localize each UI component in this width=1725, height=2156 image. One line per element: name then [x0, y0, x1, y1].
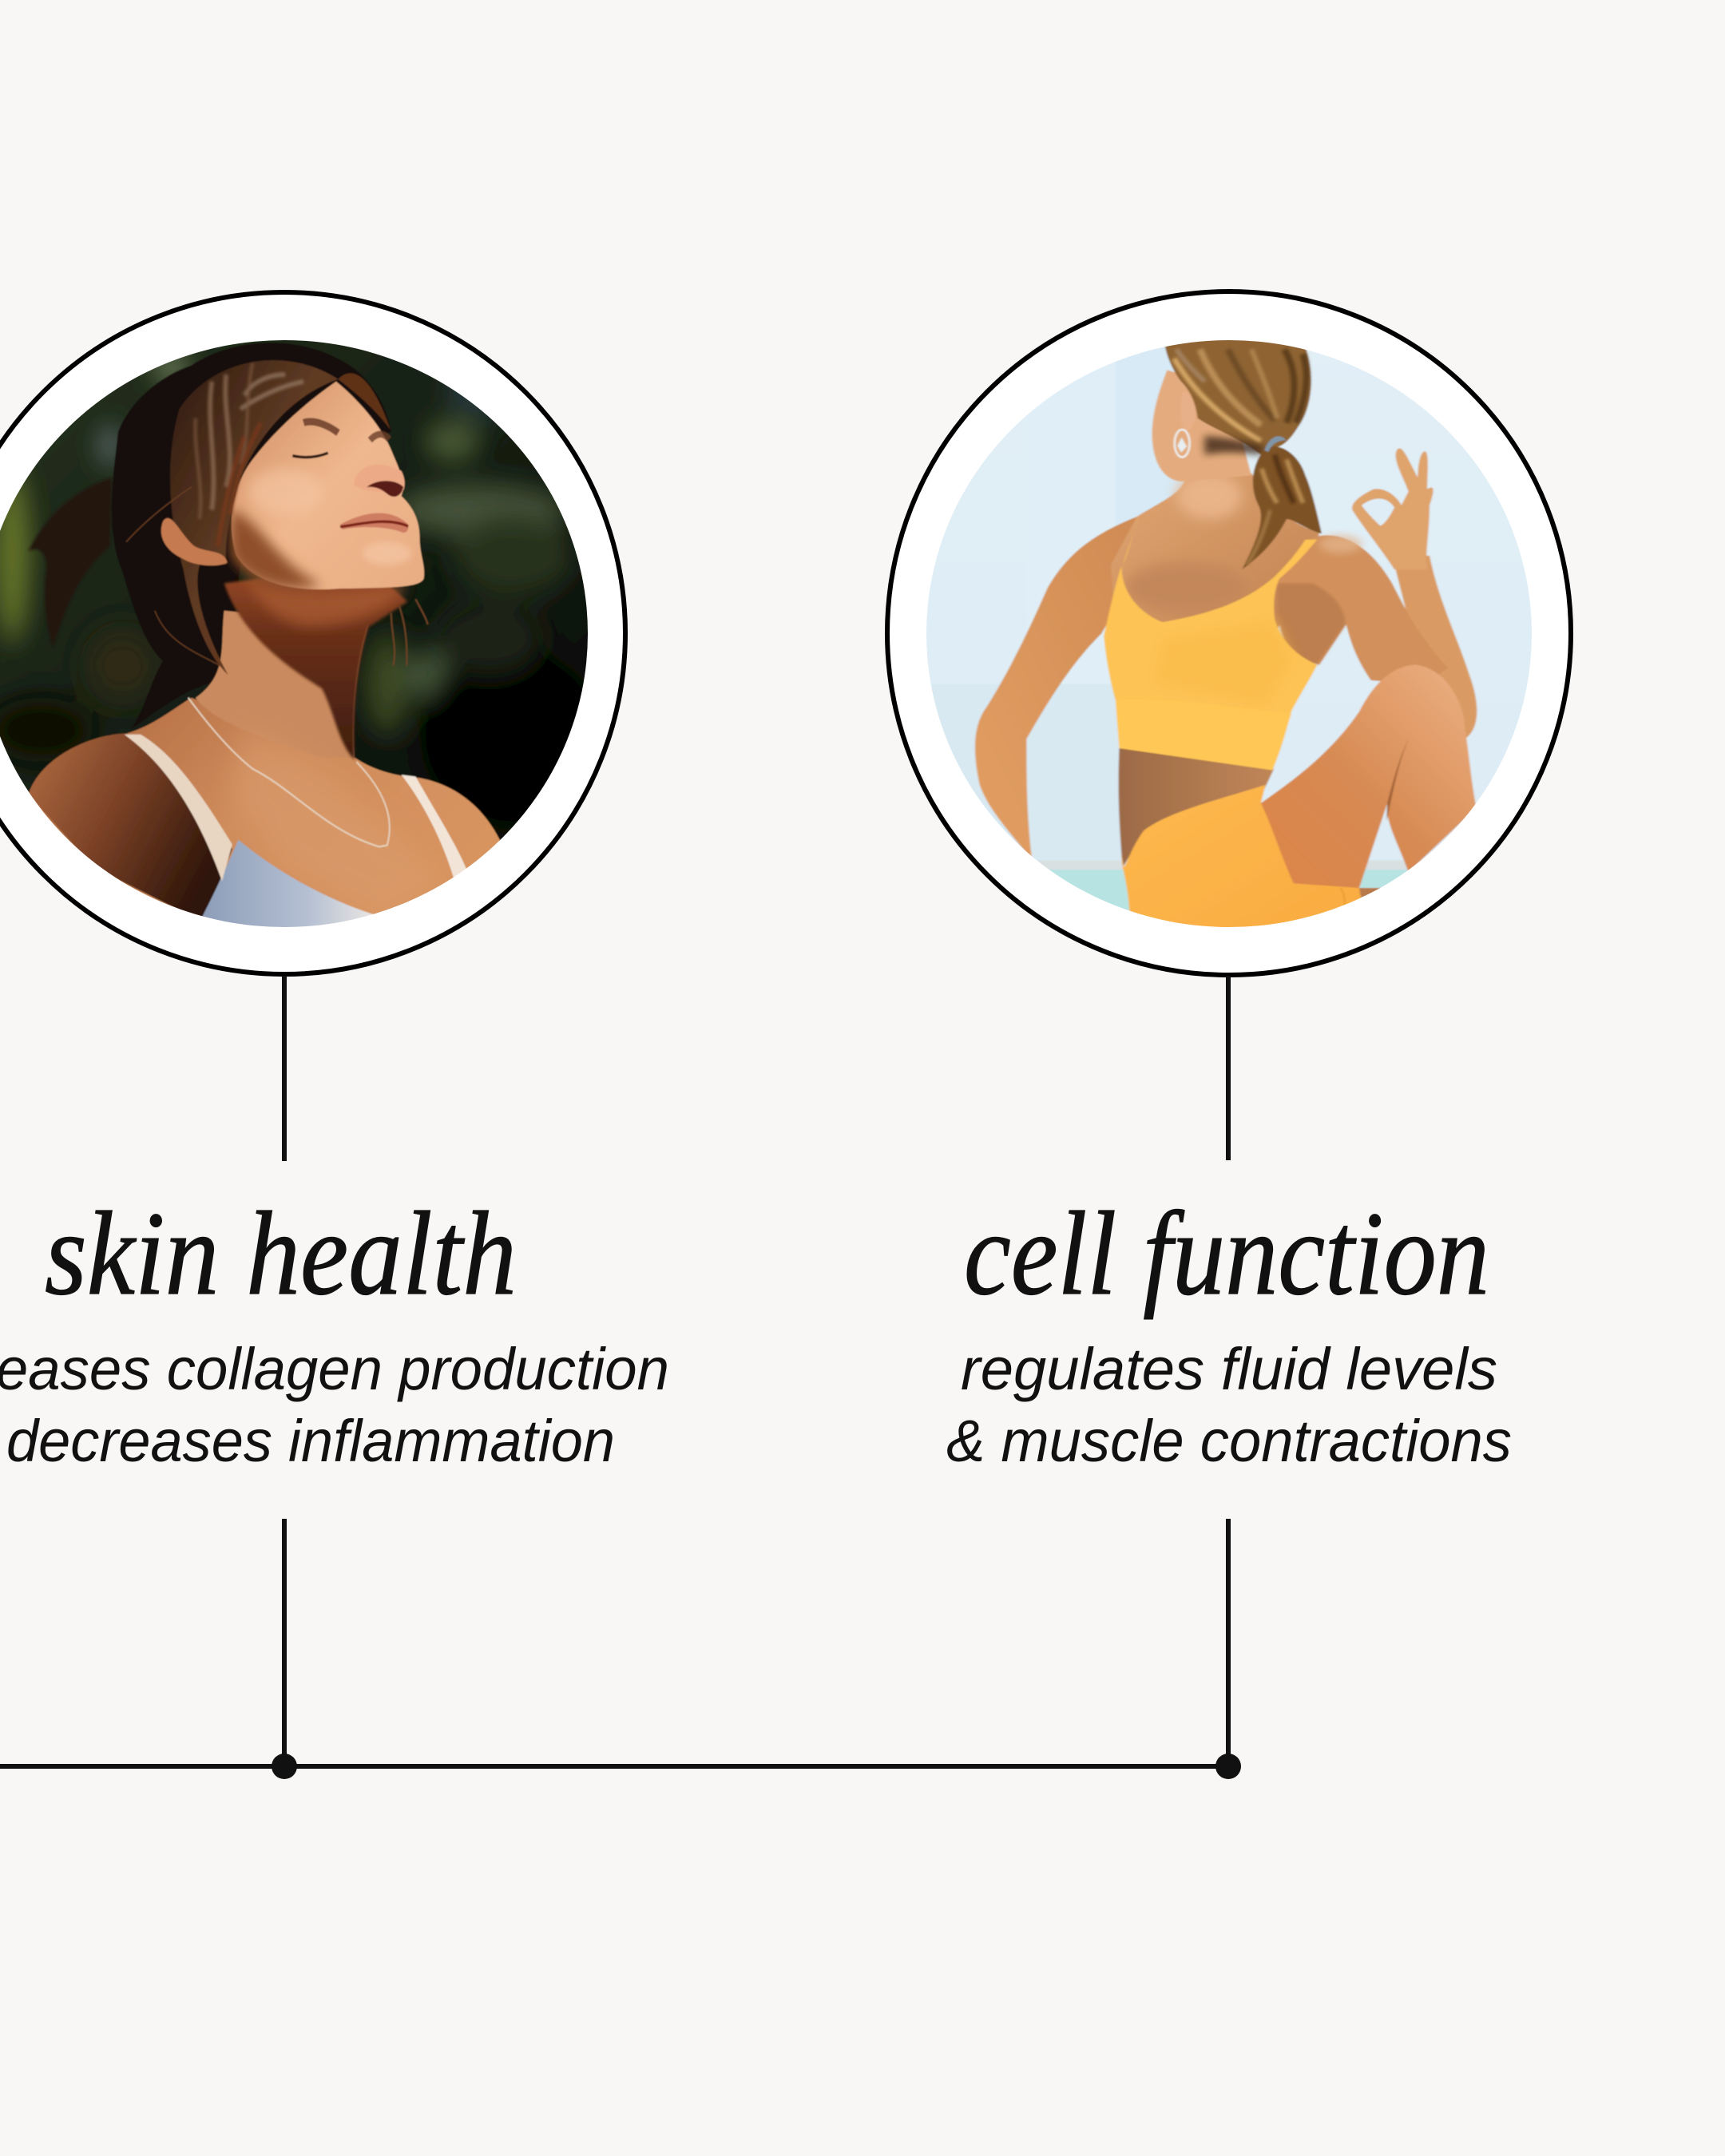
heading: skin health: skin health: [45, 1187, 517, 1320]
connector: cell function photo to heading: [1226, 976, 1231, 1160]
text block: skin health description: [0, 1336, 669, 1474]
text block: cell function description: [946, 1336, 1512, 1474]
horizontal timeline line: [0, 1764, 1228, 1769]
connector: cell function text to timeline: [1226, 1519, 1231, 1766]
connector: skin health text to timeline: [282, 1519, 287, 1766]
panel: cell function: [887, 291, 1571, 975]
photo: woman in yellow yoga outfit: [926, 340, 1532, 927]
text block: cell function description: regulates fluid levels: [961, 1336, 1497, 1402]
timeline dot: cell function: [1215, 1754, 1241, 1779]
earring: [1175, 430, 1190, 457]
circular frame: skin health: [0, 292, 625, 974]
timeline dot: skin health: [272, 1754, 297, 1779]
circular frame: cell function: [887, 291, 1571, 975]
text block: skin health description: decreases inflammation: [6, 1408, 615, 1474]
panel: skin health: [0, 292, 628, 1005]
heading: cell function: cell function: [964, 1187, 1489, 1320]
text block: cell function description: & muscle contractions: [946, 1408, 1512, 1474]
photo: woman with face raised to the sun: [0, 340, 588, 927]
connector: skin health photo to heading: [282, 976, 287, 1161]
